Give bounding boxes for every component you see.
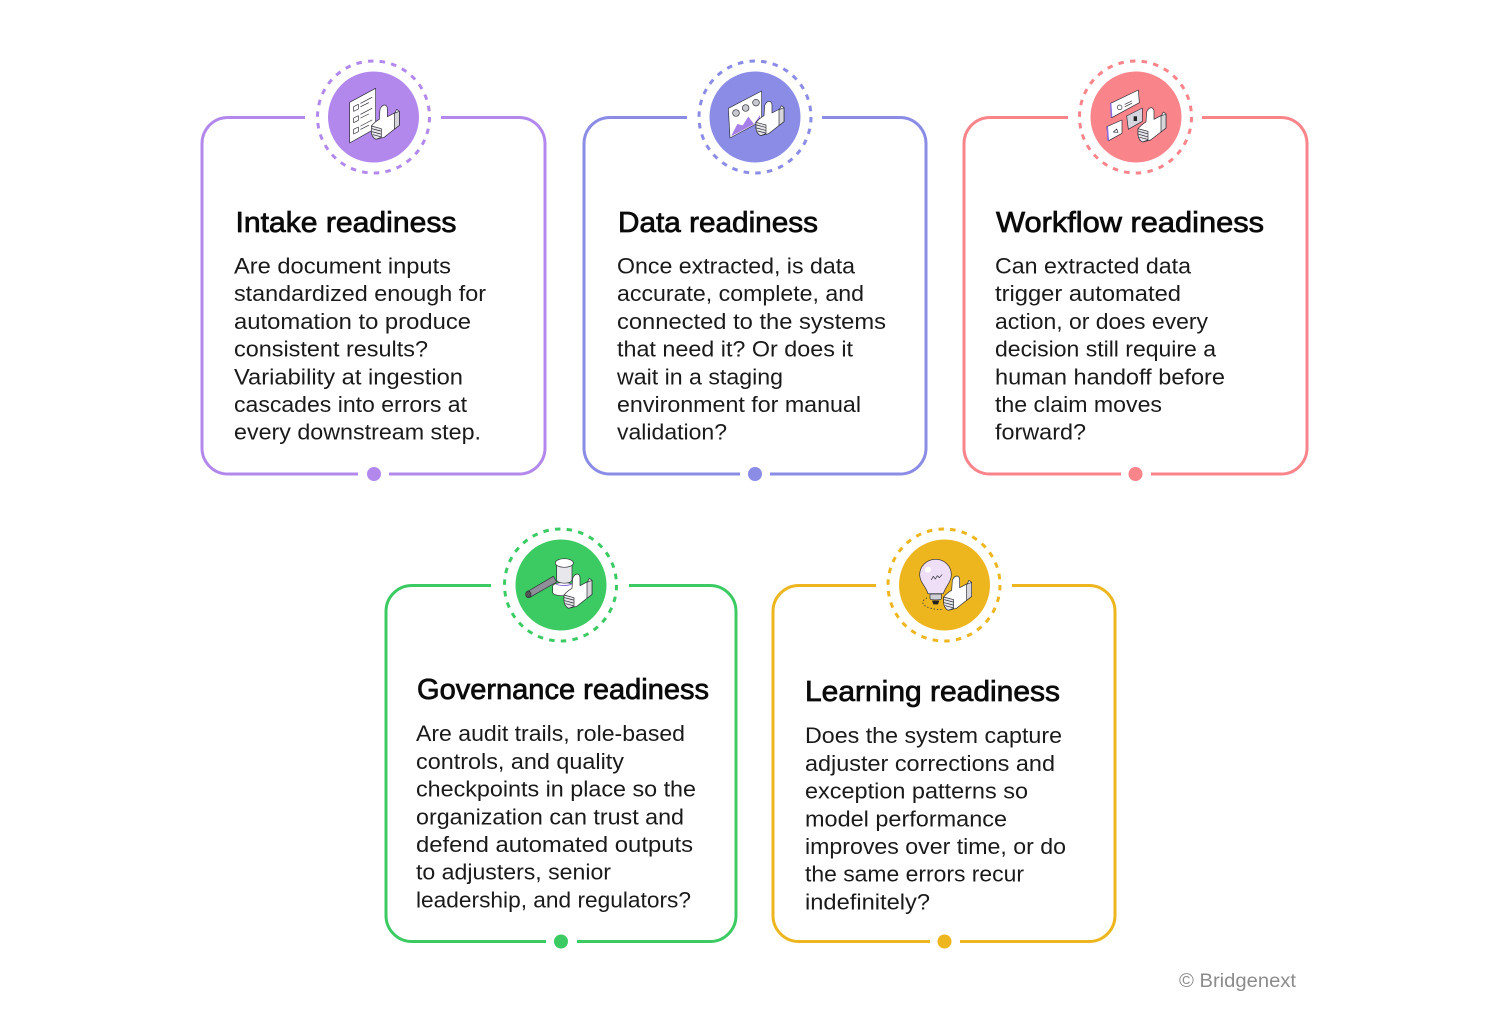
dashed ring: Governance — [504, 529, 616, 641]
text block: Intake description: every downstream step. — [234, 420, 481, 445]
icon: checklist with thumbs up — [328, 72, 419, 162]
icon: light bulb with thumbs up — [899, 540, 990, 630]
text block: Learning description: adjuster corrections and — [805, 751, 1055, 776]
heading: Governance readiness: Governance readiness — [417, 674, 709, 706]
text block: Data description: that need it? Or does it — [617, 337, 854, 362]
heading: Intake readiness: Intake readiness — [236, 207, 456, 239]
text block: Learning description — [805, 723, 1066, 914]
text block: Intake description: standardized enough for — [234, 281, 487, 306]
text block: Intake description: Variability at ingestion — [234, 364, 463, 389]
text block: Governance description — [416, 721, 696, 912]
text block: Learning description: the same errors recur — [805, 862, 1025, 887]
panel: Workflow readiness — [964, 61, 1307, 481]
dashed ring: Workflow — [1080, 61, 1192, 173]
panel: Data readiness — [584, 61, 926, 481]
icon: workflow cards with thumbs up — [1090, 72, 1182, 162]
heading: Data readiness: Data readiness — [618, 207, 818, 239]
text block: Workflow description: Can extracted data — [995, 254, 1191, 278]
card outline: Data — [584, 118, 926, 474]
text block: Workflow description: decision still require a — [995, 337, 1216, 362]
copyright note: © Bridgenext — [1179, 970, 1297, 992]
bottom dot: Governance — [554, 934, 568, 948]
text block: Learning description: indefinitely? — [805, 889, 930, 914]
text block: Intake description: Are document inputs — [234, 254, 451, 278]
text block: Governance description: defend automated outputs — [416, 832, 693, 857]
text block: Data description: wait in a staging — [616, 364, 783, 389]
text block: Workflow description: human handoff before — [995, 364, 1225, 389]
text block: Governance description: organization can trust and — [416, 804, 684, 829]
text block: Intake description: cascades into errors at — [234, 392, 468, 417]
panel: Learning readiness — [773, 529, 1115, 948]
bottom dot: Learning — [938, 934, 952, 948]
dashed ring: Intake — [318, 61, 430, 173]
dashed ring: Learning — [888, 529, 1000, 641]
text block: Data description: accurate, complete, and — [617, 281, 864, 306]
text block: Governance description: to adjusters, senior — [416, 860, 612, 885]
text block: Learning description: improves over time, or do — [805, 834, 1066, 859]
text block: Governance description: checkpoints in place so the — [416, 777, 696, 802]
text block: Governance description: leadership, and regulators? — [416, 887, 691, 912]
dashed ring: Data — [699, 61, 811, 173]
card outline: Governance — [386, 586, 736, 942]
text block: Workflow description — [995, 254, 1225, 445]
text block: Governance description: controls, and quality — [416, 749, 625, 774]
bottom dot: Workflow — [1128, 467, 1142, 481]
icon: gavel with thumbs up — [516, 540, 606, 630]
text block: Intake description: consistent results? — [234, 337, 428, 362]
icon: dashboard with thumbs up — [710, 72, 800, 162]
text block: Data description — [616, 254, 886, 445]
text block: Workflow description: action, or does every — [995, 309, 1209, 334]
bottom dot: Intake — [367, 467, 381, 481]
card outline: Workflow — [964, 118, 1307, 474]
text block: Intake description — [234, 254, 487, 445]
text block: Data description: validation? — [617, 420, 727, 445]
text block: Learning description: model performance — [805, 806, 1007, 831]
text block: Learning description: Does the system capture — [805, 723, 1062, 748]
text block: Workflow description: forward? — [995, 420, 1086, 445]
card outline: Learning — [773, 586, 1115, 942]
text block: Data description: Once extracted, is data — [617, 254, 855, 278]
heading: Workflow readiness: Workflow readiness — [996, 207, 1264, 239]
text block: Workflow description: trigger automated — [995, 281, 1181, 306]
card outline: Intake — [202, 118, 545, 474]
panel: Intake readiness — [202, 61, 545, 481]
text block: Data description: environment for manual — [617, 392, 861, 417]
heading: Learning readiness: Learning readiness — [805, 676, 1060, 708]
panel: Governance readiness — [386, 529, 736, 948]
text block: Data description: connected to the systems — [617, 309, 886, 334]
text block: Governance description: Are audit trails, role-based — [416, 721, 685, 746]
bottom dot: Data — [748, 467, 762, 481]
text block: Intake description: automation to produce — [234, 309, 471, 334]
text block: Learning description: exception patterns so — [805, 779, 1028, 804]
text block: Workflow description: the claim moves — [995, 392, 1162, 417]
